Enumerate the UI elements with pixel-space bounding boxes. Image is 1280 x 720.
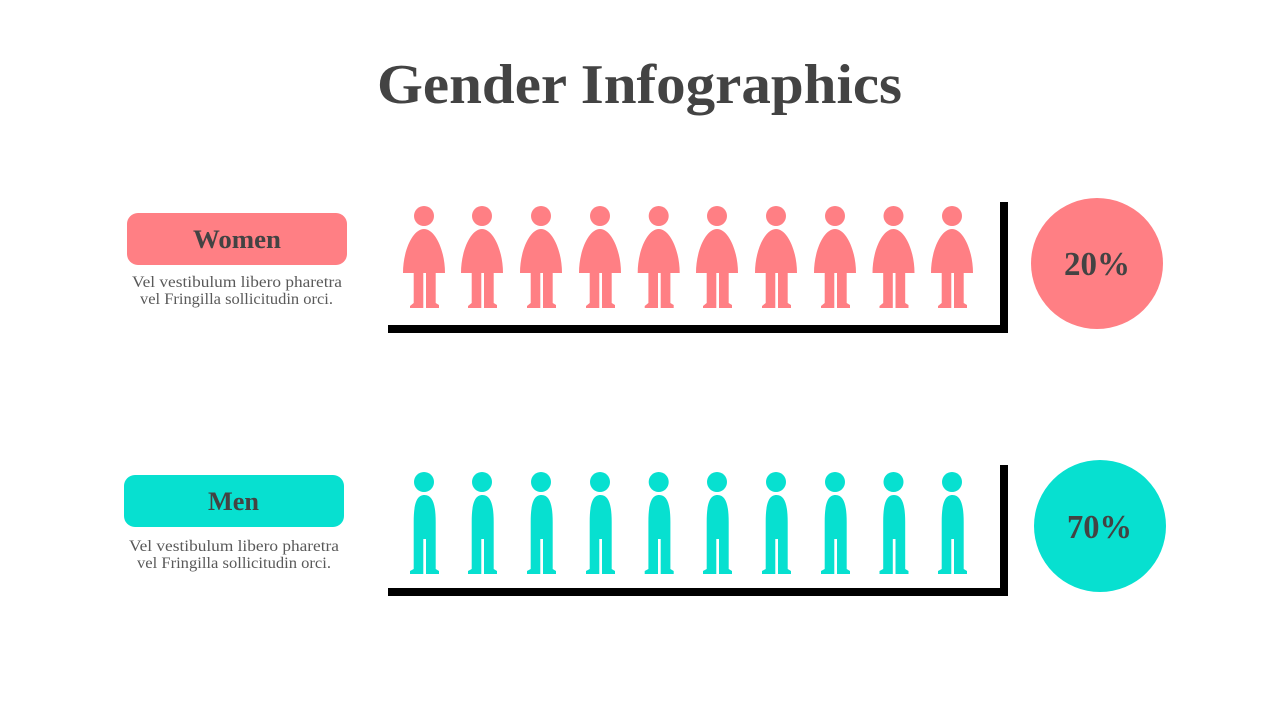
bracket: women axis <box>388 202 1008 333</box>
text block: women description: Vel vestibulum libero pharetra <box>132 274 342 291</box>
percentage badge: women 20% <box>1031 198 1163 329</box>
title: Gender Infographics <box>377 54 902 116</box>
bracket: men axis <box>388 465 1008 596</box>
text block: men description <box>129 538 339 572</box>
percentage badge: women 20%: 20% <box>1064 246 1130 283</box>
label: women: Women <box>193 225 282 254</box>
percentage badge: men 70% <box>1034 460 1166 592</box>
text block: men description: Vel vestibulum libero pharetra <box>129 538 339 555</box>
text block: women description: vel Fringilla sollicitudin orci. <box>140 291 333 308</box>
label: women <box>127 213 347 265</box>
panel: men <box>124 460 1166 596</box>
pictogram: men figures <box>410 472 967 574</box>
panel: women <box>127 198 1163 333</box>
label: men: Men <box>208 487 260 516</box>
text block: men description: vel Fringilla sollicitudin orci. <box>137 555 331 572</box>
text block: women description <box>132 274 342 308</box>
pictogram: women figures <box>403 206 973 308</box>
label: men <box>124 475 344 527</box>
percentage badge: men 70%: 70% <box>1067 509 1132 546</box>
